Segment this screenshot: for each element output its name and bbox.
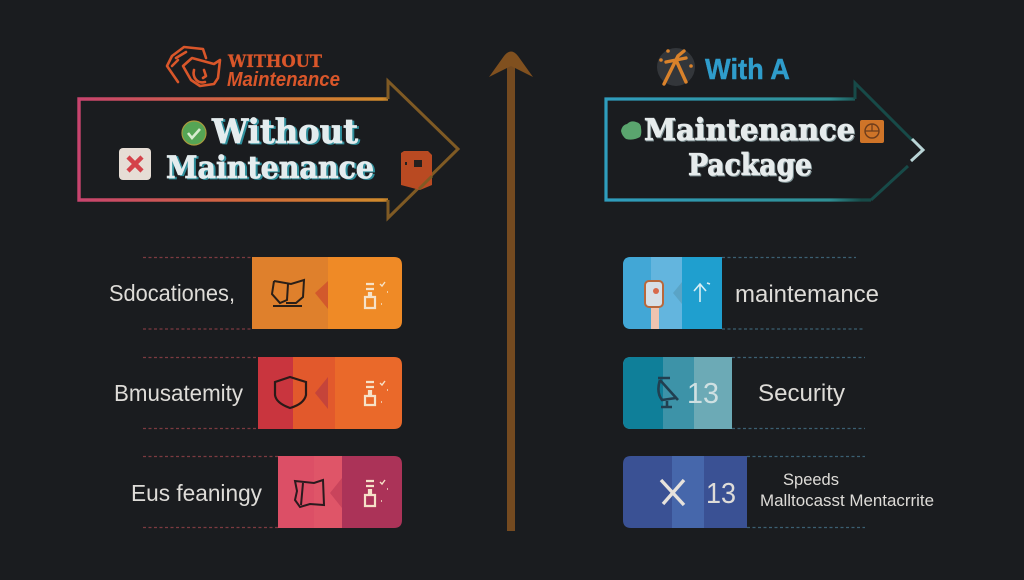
left heading text: Without bbox=[211, 112, 358, 152]
icon: bottle bbox=[365, 282, 388, 308]
icon: orange block bbox=[401, 151, 432, 190]
left arrow head bbox=[388, 81, 458, 218]
icon: orange square bbox=[860, 120, 884, 143]
label: Eus feaningy bbox=[131, 480, 262, 506]
right row 2 bbox=[623, 357, 845, 429]
label: Speeds bbox=[783, 471, 839, 489]
left heading: without maintenance: Maintenance bbox=[227, 69, 340, 91]
icon: bottle bbox=[365, 480, 388, 506]
left heading: without maintenance bbox=[167, 47, 340, 91]
label: Bmusatemity bbox=[114, 380, 243, 406]
central vertical arrow bbox=[489, 52, 533, 531]
icon: shield outline bbox=[272, 280, 304, 306]
label: Sdocationes, bbox=[109, 280, 235, 306]
right heading text: Maintenance bbox=[644, 113, 855, 148]
bar bbox=[623, 456, 747, 528]
left heading: without maintenance: WITHOUT bbox=[227, 52, 322, 72]
number: 13 bbox=[687, 378, 719, 410]
icon: shield bbox=[275, 377, 306, 408]
right row 3 bbox=[623, 456, 934, 528]
left row 3 bbox=[131, 456, 402, 528]
bar bbox=[278, 456, 402, 528]
bar bbox=[258, 357, 402, 429]
icon: pillow outline bbox=[295, 480, 324, 507]
right arrow tip chevron bbox=[911, 139, 923, 161]
right heading: with a bbox=[657, 48, 790, 86]
icon: telescope bbox=[658, 378, 678, 407]
right heading text bbox=[644, 113, 856, 184]
left heading text: Maintenance bbox=[166, 150, 374, 186]
left heading text: Maintenance bbox=[168, 151, 376, 187]
icon: bottle bbox=[365, 381, 388, 405]
left heading text bbox=[166, 112, 376, 187]
left row 1 bbox=[109, 257, 402, 329]
right arrow head bbox=[855, 83, 912, 200]
right heading text: Package bbox=[688, 148, 812, 183]
icon: mechanic line drawing bbox=[167, 47, 220, 86]
label: maintemance bbox=[735, 281, 879, 308]
bar bbox=[623, 257, 722, 329]
icon: green check bbox=[182, 121, 206, 145]
right row 1 bbox=[623, 257, 879, 329]
right heading text: Package bbox=[689, 149, 813, 184]
left heading text: Without bbox=[213, 113, 360, 153]
left row 2 bbox=[114, 357, 402, 429]
left arrow outline bbox=[79, 99, 388, 200]
label bbox=[760, 471, 934, 510]
icon: red cross tile bbox=[119, 148, 151, 180]
icon: clock with figure bbox=[657, 48, 695, 86]
bar bbox=[252, 257, 402, 329]
label: Malltocasst Mentacrrite bbox=[760, 492, 934, 510]
icon: crossed tools bbox=[661, 480, 684, 505]
right heading text: Maintenance bbox=[645, 114, 856, 149]
icon: up arrow bbox=[694, 283, 710, 302]
right heading: with a: With A bbox=[705, 54, 790, 86]
number: 13 bbox=[706, 478, 736, 510]
icon: green badge bbox=[621, 121, 641, 140]
dashed guide lines bbox=[143, 258, 865, 528]
bar bbox=[623, 357, 732, 429]
icon: brush bbox=[645, 281, 663, 329]
label: Security bbox=[758, 380, 845, 407]
right arrow outline bbox=[606, 99, 871, 200]
